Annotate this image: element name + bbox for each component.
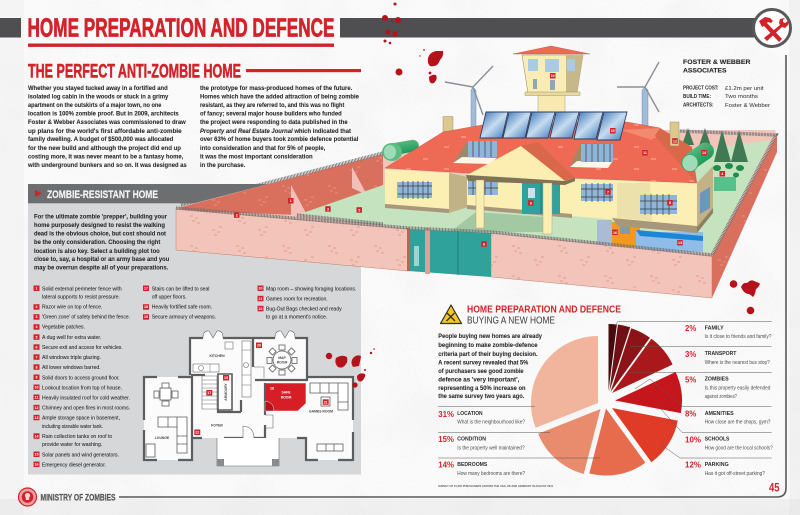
legend column 1: Solid doors to access ground floor. (42, 375, 120, 381)
legend column 3: to go at a moment's notice. (266, 315, 328, 321)
legend column 1: Emergency diesel generator. (42, 462, 106, 468)
room labels: ROOM (277, 360, 287, 364)
intro text column 1: family dwelling. A budget of $500,000 was allocated (28, 136, 174, 143)
pie labels left: 14% (438, 461, 454, 470)
zombie-resistant intro text: dead is the obvious choice, but cost should not (34, 230, 166, 238)
front door (522, 183, 560, 214)
pie labels right: Is this property easily defended (705, 385, 770, 391)
section arrow (35, 190, 42, 197)
intro text column 2: the project were responding to data published in the (200, 119, 348, 126)
buying intro text: beginning to make zombie-defence (438, 342, 538, 349)
pie labels left: LOCATION (457, 411, 483, 417)
slice: family 2% (608, 324, 617, 391)
legend column 1 (34, 286, 130, 468)
slice: amenities 8% (612, 339, 673, 393)
pie labels right: 3% (685, 350, 696, 359)
project facts: foster and webber (683, 59, 770, 109)
chimney right and roof tank (670, 122, 717, 172)
number badges on house: 14 (702, 151, 706, 155)
pie labels right: FAMILY (705, 325, 724, 331)
intro text column 1: up plans for the world's first affordable anti-zombie (28, 128, 182, 135)
floor plan badges: 20 (257, 344, 261, 348)
leader lines (438, 321, 772, 458)
number badges on house: 16 (613, 231, 617, 235)
armoury: ARMOURY (224, 383, 228, 401)
zombie-resistant intro text: home purposely designed to resist the walking (34, 222, 165, 229)
legend column 1: 12 (34, 406, 38, 410)
blood splatters (326, 2, 760, 388)
buying intro text: the same survey two years ago. (438, 393, 525, 400)
safe room: SAFE (281, 390, 291, 394)
house illustration (176, 46, 777, 298)
stairs (202, 376, 217, 409)
legend column 1: 15 (34, 452, 38, 456)
legend column 2: 18 (144, 305, 148, 309)
section heading: ZOMBIE-RESISTANT HOME (47, 189, 158, 201)
front perimeter wall (176, 135, 777, 298)
intro text column 1: Whether you stayed tucked away in a fortified and (28, 85, 168, 92)
pie labels right: Where is the nearest bus stop? (705, 360, 770, 366)
title: HOME PREPARATION AND DEFENCE (28, 12, 334, 42)
logo (18, 488, 36, 506)
wind turbine right (617, 62, 659, 128)
project facts: foster and webber: £1.2m per unit (725, 86, 764, 92)
intro text column 1: costing more, it was never meant to be a fantasy home, (28, 154, 184, 160)
pie labels right: SCHOOLS (705, 436, 730, 442)
legend column 2: Secure armoury of weapons. (152, 315, 216, 321)
legend column 1: A dug well for extra water. (42, 335, 102, 341)
floor plan (144, 331, 353, 466)
floor plan badges: 19 (224, 376, 228, 380)
intro text column 2: the prototype for mass-produced homes of the future. (200, 85, 353, 92)
number badges on house: 13 (678, 241, 682, 245)
legend column 2: Stairs can be lifted to seal (152, 286, 209, 292)
buying intro text: People buying new homes are already (438, 333, 543, 340)
buying intro text (438, 333, 543, 400)
legend column 1: 'Green zone' of safety behind the fence. (42, 315, 130, 321)
pie labels right: ZOMBIES (705, 377, 729, 383)
legend column 2: 19 (144, 315, 148, 319)
pie labels left: Is the property well maintained? (457, 445, 525, 451)
legend column 1: 10 (34, 386, 38, 390)
number badges on house: 1 (290, 199, 292, 203)
project facts: foster and webber: PROJECT COST: (683, 86, 719, 92)
legend column 1: 14 (34, 434, 38, 438)
number badges on house: 10 (551, 74, 555, 78)
razor wire (176, 131, 776, 255)
legend column 1: 4 (36, 325, 38, 329)
dormer windows (453, 141, 613, 168)
zombie-resistant intro text: close to, say, a hospital or an army base and you (34, 256, 170, 263)
lounge furniture (146, 383, 187, 457)
pie labels right: 5% (685, 375, 696, 384)
slice: schools 10% (615, 372, 682, 413)
legend column 1: 9 (36, 376, 38, 380)
legend column 1: Solid external perimeter fence with (42, 286, 122, 292)
kitchen fittings (193, 341, 251, 397)
legend column 1: All windows triple glazing. (42, 355, 101, 361)
page number: 45 (769, 482, 780, 494)
heading: buying a new home: HOME PREPARATION AND DEFENCE (467, 304, 621, 316)
icon: warning triangle (440, 305, 462, 324)
map room table (267, 345, 297, 375)
pie labels right: 2% (685, 324, 696, 333)
ministry of zombies footer (18, 488, 116, 506)
legend column 1: Secure exit and access for vehicles. (42, 345, 123, 351)
project facts: foster and webber: Two months (725, 94, 758, 100)
slice: zombies 5% (610, 328, 650, 392)
legend column 1: Rain collection tanks on roof to (42, 434, 112, 440)
number badges on house: 6 (483, 242, 485, 246)
buying intro text: defence as 'very important', (438, 376, 520, 384)
header band (0, 18, 765, 38)
pie labels right: 8% (685, 409, 696, 418)
zombie-resistant intro text: be the only consideration. Choosing the right (34, 239, 160, 246)
intro text column 2: it was the most important consideration (200, 154, 313, 160)
legend column 3: 20 (258, 286, 262, 290)
safe room: ROOM (281, 396, 291, 400)
pie labels left: 31% (438, 410, 454, 419)
zombie-resistant intro text: may be overrun despite all of your preparations. (34, 264, 169, 272)
walls (144, 338, 353, 460)
title underline (28, 44, 334, 47)
icon: crossed hammer and wrench (754, 10, 790, 46)
games room furniture (310, 383, 348, 451)
pie labels right: PARKING (705, 462, 729, 468)
back walls and ground (176, 130, 777, 256)
pie chart (438, 321, 772, 476)
legend column 1: 16 (34, 462, 38, 466)
pie labels left: What is the neighbourhood like? (457, 420, 525, 426)
intro text column 1: location is 100% zombie proof. But in 2009, architects (28, 110, 179, 118)
basement (597, 220, 703, 252)
legend column 1: including sizeable water tank. (42, 424, 103, 430)
number badges on house: 9 (530, 202, 532, 206)
legend column 3: Map room – showing foraging locations. (266, 286, 357, 292)
pie labels right: How close are the shops, gym? (705, 420, 770, 426)
intro text column 2: Homes which have the added attraction of being zombie (200, 94, 360, 100)
intro text column 1: isolated log cabin in the woods or stuck in a grimy (28, 94, 169, 100)
intro text column 1 (27, 85, 187, 169)
floor plan badges: 22 (195, 430, 199, 434)
intro text column 1: for the new build and although the project did end up (28, 145, 181, 152)
heading: buying a new home: BUYING A NEW HOME (467, 314, 555, 326)
solar panels (480, 112, 627, 140)
intro text column 1: with underground bunkers and so on. It was designed as (27, 162, 187, 169)
intro text column 1: Foster & Webber Associates was commissioned to draw (28, 119, 186, 126)
buying intro text: of purchasers see good zombie (438, 368, 524, 375)
pie labels right: against zombies? (705, 394, 737, 400)
heading: the perfect anti-zombie home: THE PERFECT ANTI-ZOMBIE HOME (28, 60, 241, 82)
pie labels right: 12% (685, 461, 701, 470)
slice: parking 12% (612, 408, 678, 462)
legend column 2 (143, 286, 216, 321)
slice: transport 3% (610, 324, 630, 391)
room labels: GAMES ROOM (309, 410, 333, 414)
legend column 1: 8 (36, 365, 38, 369)
room labels: FOYER (211, 424, 223, 428)
number badges on house: 2 (236, 214, 238, 218)
section bar (28, 184, 288, 203)
number badges on house (234, 73, 725, 247)
panel: zombie-resistant home (28, 184, 361, 474)
pie labels right: TRANSPORT (705, 351, 737, 357)
survey footnote: SURVEY OF 15,052 PURCHASERS ACROSS THE USA, UK AND GERMANY IN AUGUST 2011 (438, 484, 553, 488)
legend column 1: 13 (34, 416, 38, 420)
porch (466, 142, 575, 234)
number badges on house: 8 (669, 201, 671, 205)
project facts: foster and webber: FOSTER & WEBBER (683, 59, 751, 66)
pie labels right: How good are the local schools? (705, 445, 773, 451)
legend column 1: Ample storage space in basement, (42, 416, 120, 422)
left rain tank (382, 139, 420, 161)
legend column 3: 22 (258, 307, 262, 311)
project facts: foster and webber: ASSOCIATES (683, 68, 727, 75)
floor area (144, 338, 353, 460)
number badges on house: 15 (611, 129, 615, 133)
pie labels right: Is it close to friends and family? (705, 334, 771, 340)
number badges on house: 3 (327, 208, 329, 212)
buying intro text: representing a 50% increase on (438, 385, 526, 392)
footer label: MINISTRY OF ZOMBIES (40, 492, 116, 502)
slice: bedrooms 14% (589, 408, 645, 476)
intro text column 2: into consideration and that for 5% of people, (200, 145, 326, 152)
legend column 1: provide water for washing. (42, 442, 103, 448)
legend column 1: Chimney and open fires in most rooms. (42, 406, 130, 412)
zombie-resistant intro text (34, 214, 170, 272)
legend column 1: 5 (36, 335, 38, 339)
legend column 1: Lookout location from top of house. (42, 385, 122, 391)
legend column 3 (258, 286, 357, 321)
number badges on house: 5 (358, 208, 360, 212)
house walls (385, 166, 713, 233)
buying intro text: criteria part of their buying decision. (438, 351, 538, 358)
project facts: foster and webber: BUILD TIME: (683, 94, 711, 100)
legend column 1: 2 (36, 305, 38, 309)
zombie-resistant intro text: location is also key. Select a building plot too (34, 248, 160, 255)
roof (385, 122, 697, 183)
windows with bars (397, 179, 710, 215)
slice: location 31% (531, 336, 598, 428)
legend column 3: Bug-Out Bags checked and ready (266, 307, 342, 313)
legend column 2: Heavily fortified safe room. (152, 305, 212, 311)
floor plan badges: 21 (324, 400, 328, 404)
legend column 1: 7 (36, 355, 38, 359)
chimney left (443, 116, 453, 132)
legend column 1: 6 (36, 345, 38, 349)
pie labels right: AMENITIES (705, 411, 734, 417)
legend column 1: Razor wire on top of fence. (42, 305, 103, 311)
legend column 1: 11 (35, 396, 38, 400)
legend column 1: All lower windows barred. (42, 365, 101, 371)
room labels: LOUNGE (155, 436, 170, 440)
intro text column 2 (200, 85, 360, 169)
legend column 3: Games room for recreation. (266, 297, 328, 303)
legend column 2: off upper floors. (152, 295, 187, 301)
slice: condition 15% (538, 409, 600, 474)
porch (217, 438, 279, 466)
french doors (203, 331, 295, 338)
trees and vegetable patch (682, 128, 748, 191)
floor plan badges: 17 (207, 391, 211, 395)
watchtower (513, 46, 590, 115)
legend column 1: lateral supports to resist pressure. (42, 295, 120, 301)
intro text column 2: in the purchase. (200, 162, 246, 169)
intro text column 2: over 63% of home buyers took zombie defence potential (200, 136, 359, 143)
floor plan badges (194, 342, 329, 435)
legend column 1: Vegetable patches. (42, 325, 85, 331)
intro text column 2: of fancy; several major house builders who funded (200, 110, 342, 118)
internal doors (243, 367, 273, 438)
pie labels left: CONDITION (457, 436, 486, 442)
floor plan badges: 18 (270, 386, 274, 390)
room labels: KITCHEN (209, 354, 225, 358)
number badges on house: 4 (721, 172, 723, 176)
pie labels right: Has it got off-street parking? (705, 471, 765, 477)
legend column 1: 3 (36, 315, 38, 319)
legend column 2: 17 (144, 286, 148, 290)
room labels (155, 354, 333, 440)
number badges on house: 7 (607, 190, 609, 194)
intro text column 1: apartment on the outskirts of a major town, no one (28, 102, 162, 109)
safe room (265, 383, 306, 411)
legend column 3: 21 (258, 297, 262, 301)
buying intro text: A recent survey revealed that 5% (438, 360, 529, 366)
zombie-resistant intro text: For the ultimate zombie 'prepper', building your (34, 214, 168, 220)
project facts: foster and webber: ARCHITECTS: (683, 103, 714, 109)
project facts: foster and webber: Foster & Webber (725, 103, 770, 109)
number badges on house: 12 (673, 140, 677, 144)
pie labels right: 10% (685, 435, 701, 444)
legend column 1: Solar panels and wind generators. (42, 452, 119, 458)
pie labels right (685, 324, 773, 477)
intro text column 2: Property and Real Estate Journal which indicated that (200, 128, 351, 135)
room labels: MAP (278, 356, 286, 360)
intro text column 2: resistant, as they are referred to, and this was no flight (200, 102, 344, 109)
wind turbine left (445, 66, 493, 128)
pie labels left: 15% (438, 435, 454, 444)
pie labels left: How many bedrooms are there? (457, 471, 525, 477)
legend column 1: Heavily insulated roof for cold weather. (42, 395, 130, 401)
heading: buying a new home (467, 304, 621, 326)
pie labels left (438, 410, 525, 477)
armoury (218, 374, 232, 410)
legend column 1: 1 (36, 286, 38, 290)
pie labels left: BEDROOMS (457, 462, 488, 468)
number badges on house: 11 (643, 151, 647, 155)
page frame line (119, 55, 786, 497)
